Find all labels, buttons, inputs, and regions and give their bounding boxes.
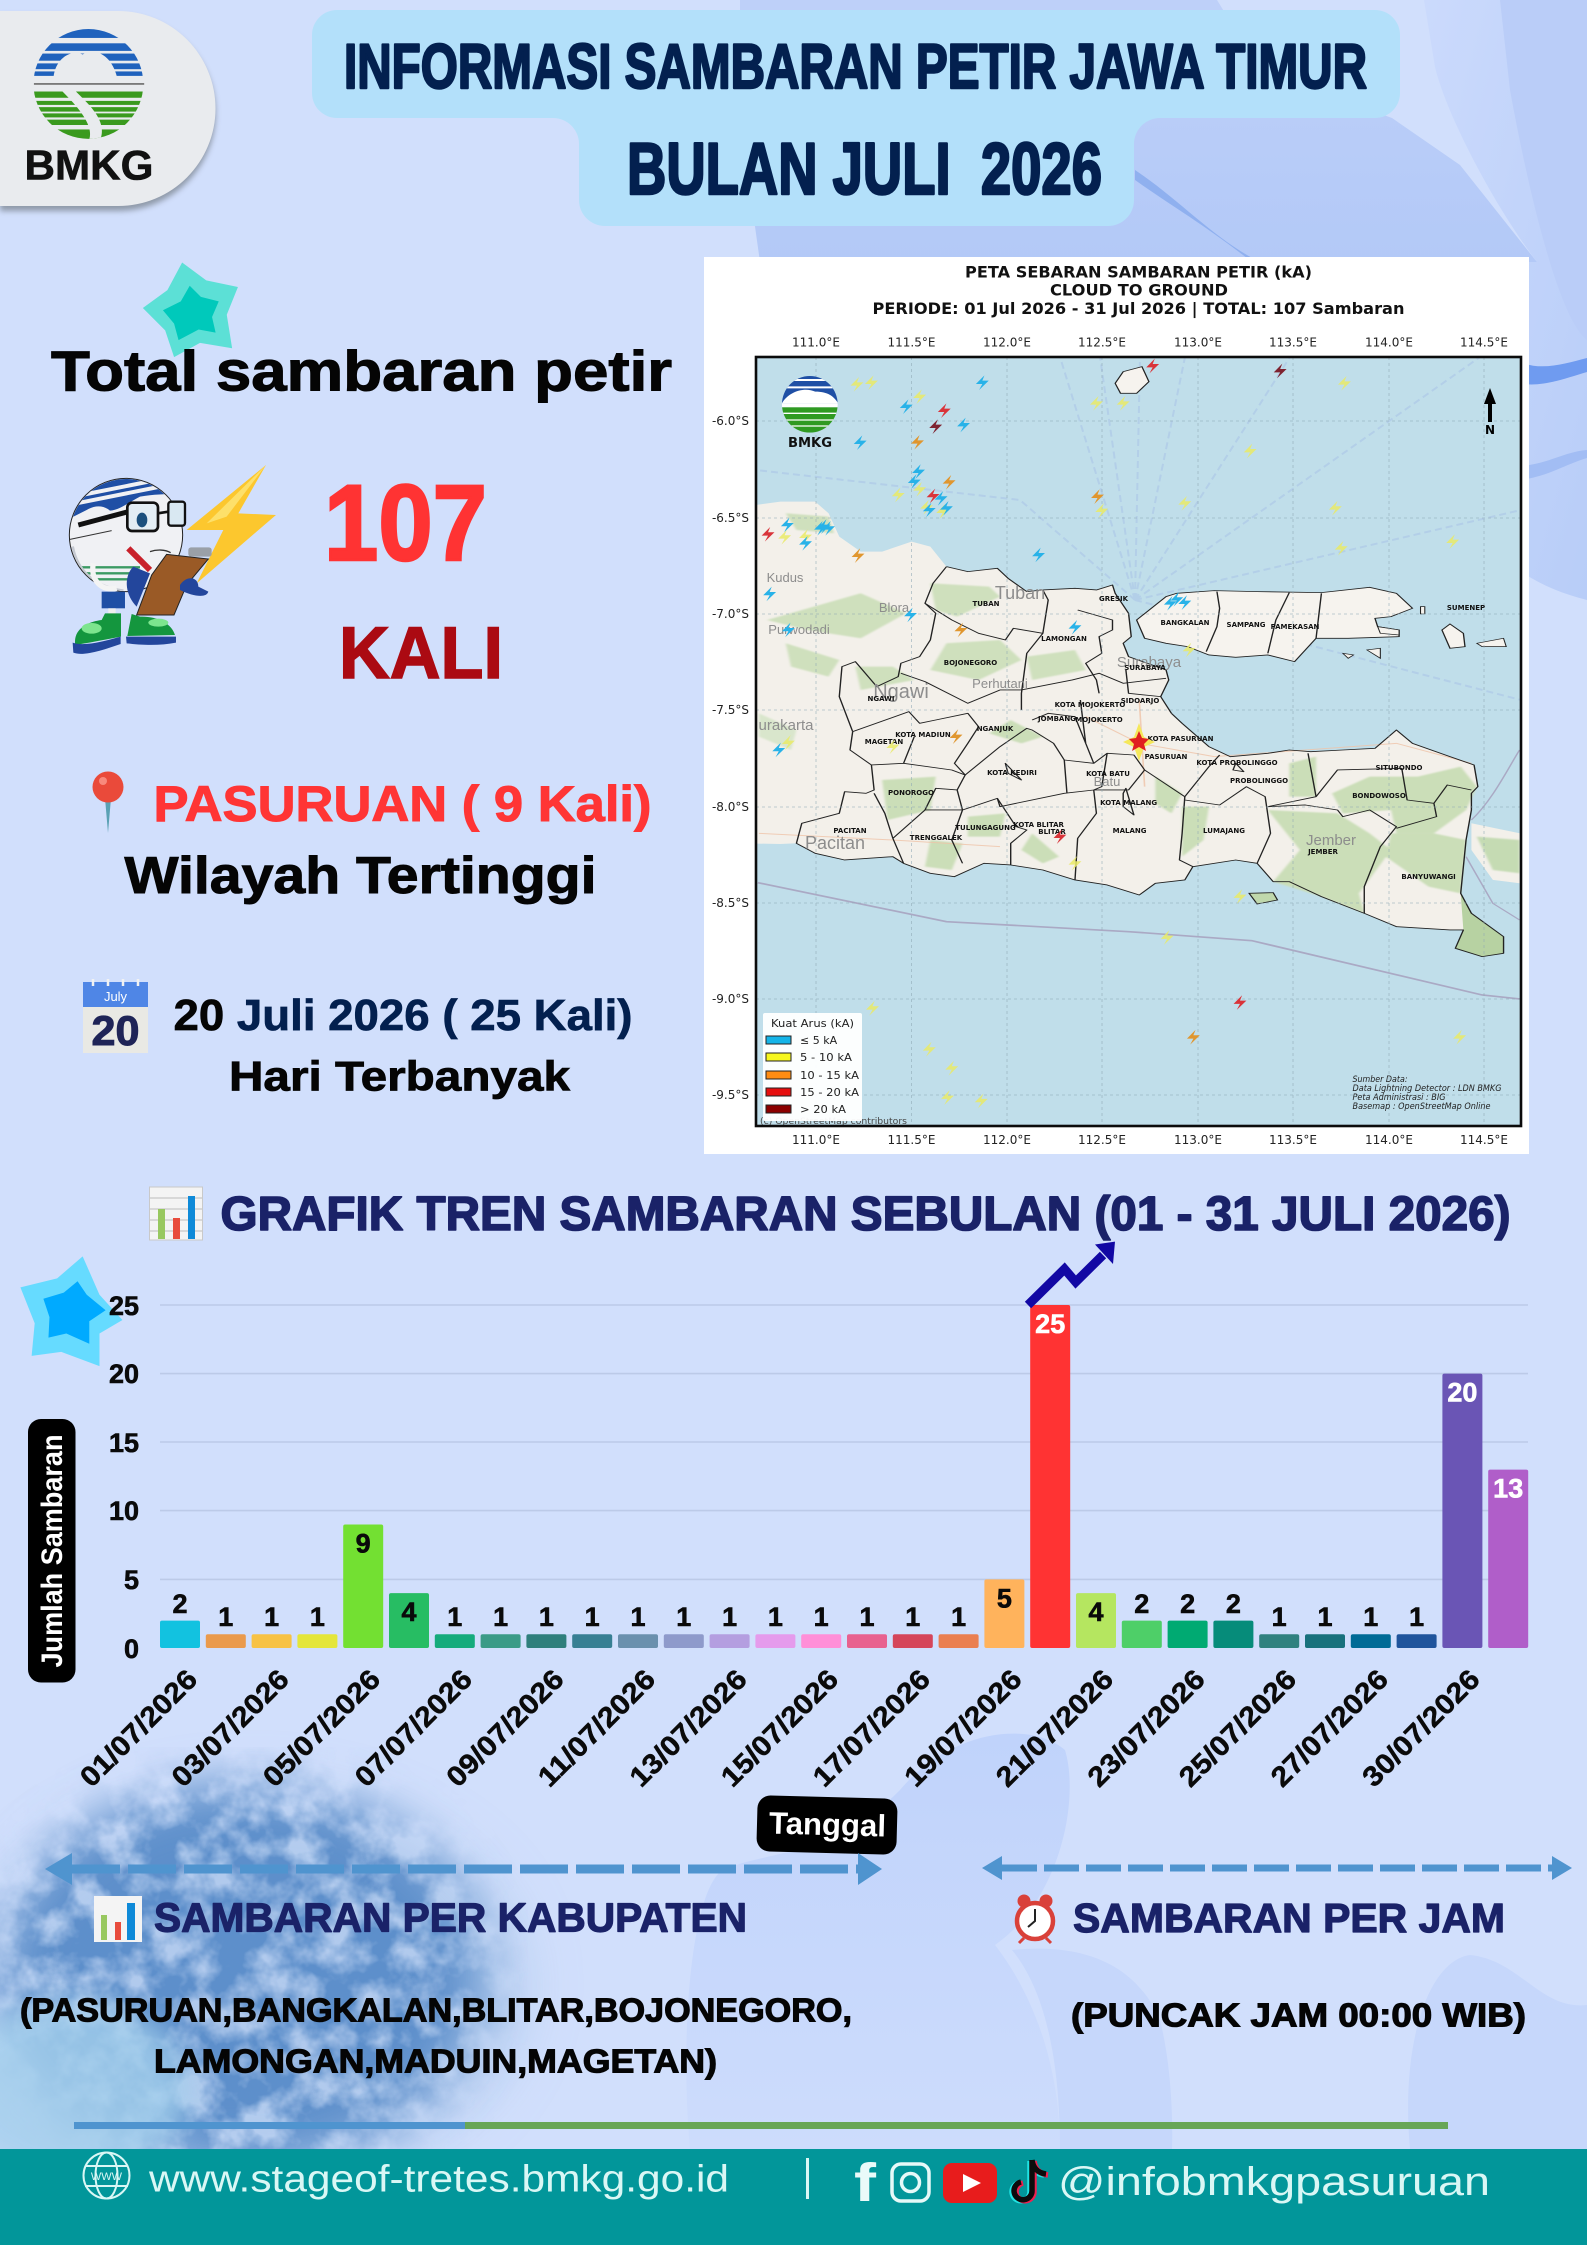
icon: north arrow: [1484, 388, 1496, 437]
district list: LAMONGAN,MADUIN,MAGETAN): [154, 2042, 717, 2080]
east java regional detail: [758, 700, 1520, 999]
map legend: [763, 1013, 862, 1121]
title banner: [312, 10, 1400, 226]
x axis date labels: 03/07/2026: [165, 1663, 295, 1793]
x axis title pill: Tanggal: [769, 1805, 886, 1844]
map titles: [872, 262, 1404, 319]
total strike count: 107: [324, 462, 487, 583]
icon: highest strike star: [1123, 723, 1155, 761]
kabupaten labels: BLITAR: [1038, 828, 1066, 836]
map axis labels: 111.0°E: [792, 1133, 840, 1147]
kabupaten labels: KOTA BLITAR: [1013, 821, 1064, 829]
logo wordmark: BMKG: [24, 142, 154, 188]
y axis tick labels: 20: [109, 1359, 139, 1389]
per district heading: SAMBARAN PER KABUPATEN: [154, 1894, 747, 1940]
icon: bar chart emoji: [150, 1187, 202, 1240]
map axis labels: 113.5°E: [1269, 1133, 1317, 1147]
map axis labels: 112.5°E: [1078, 1133, 1126, 1147]
kabupaten labels: KOTA MOJOKERTO: [1055, 701, 1125, 709]
kabupaten labels: BANYUWANGI: [1401, 873, 1456, 881]
bar value labels: 1: [310, 1602, 325, 1632]
panel: lightning distribution map: -9.0°S: [712, 992, 749, 1006]
highest region: PASURUAN ( 9 Kali): [154, 776, 652, 832]
bar value labels: 4: [1088, 1597, 1104, 1627]
forest patches: [767, 513, 1086, 690]
bar value labels: 1: [630, 1602, 646, 1632]
icon: north arrow: N: [1485, 423, 1495, 437]
bar value labels: 1: [768, 1602, 783, 1632]
kabupaten labels: SITUBONDO: [1375, 764, 1423, 772]
icon: calendar: [83, 979, 148, 1054]
icon: facebook: f: [854, 2153, 877, 2213]
grid lines: [756, 357, 1521, 1126]
map legend: 5 - 10 kA: [800, 1051, 852, 1064]
bar value labels: 13: [1493, 1474, 1523, 1504]
kabupaten labels: KOTA PASURUAN: [1148, 735, 1214, 743]
kabupaten labels: KOTA MADIUN: [895, 731, 951, 739]
land: [732, 367, 1520, 957]
x axis date labels: 21/07/2026: [990, 1663, 1119, 1793]
kabupaten labels: SUMENEP: [1447, 604, 1485, 612]
bar value labels: 9: [356, 1528, 371, 1558]
y axis tick labels: [109, 1291, 139, 1664]
panel: lightning distribution map: -9.5°S: [712, 1088, 749, 1102]
kabupaten labels: BANGKALAN: [1161, 619, 1210, 627]
map axis labels: 114.5°E: [1460, 336, 1508, 350]
bar value labels: 2: [1134, 1589, 1149, 1619]
peak day: 20 Juli 2026 ( 25 Kali): [174, 991, 632, 1040]
x axis date labels: 27/07/2026: [1265, 1663, 1394, 1793]
kabupaten labels: PROBOLINGGO: [1230, 777, 1288, 785]
kabupaten labels: PACITAN: [833, 827, 867, 835]
bar value labels: 1: [585, 1602, 600, 1632]
map frame: [756, 357, 1521, 1126]
map area: (c) OpenStreetMap contributors: [760, 1117, 907, 1127]
basemap place names: Ngawi: [873, 681, 929, 703]
map titles: PETA SEBARAN SAMBARAN PETIR (kA): [965, 262, 1312, 282]
basemap place names: Blora: [879, 600, 910, 615]
kabupaten labels: MAGETAN: [865, 738, 903, 746]
kabupaten labels: GRESIK: [1099, 595, 1129, 603]
kabupaten labels: NGAWI: [867, 695, 895, 703]
bar value labels: 1: [493, 1602, 508, 1632]
kabupaten labels: PASURUAN: [1145, 753, 1188, 761]
icon: tiktok: [1012, 2160, 1048, 2201]
icon: globe: [84, 2152, 130, 2198]
x axis date labels: 09/07/2026: [440, 1663, 570, 1793]
basemap place names: Pacitan: [805, 833, 865, 853]
bar value labels: 1: [1272, 1602, 1287, 1632]
shipping lanes: [756, 357, 1521, 700]
chart heading: GRAFIK TREN SAMBARAN SEBULAN (01 - 31 JULI 2026): [220, 1188, 1510, 1241]
x axis date labels: 23/07/2026: [1081, 1663, 1211, 1793]
y axis title: [28, 1419, 76, 1682]
x axis date labels: 07/07/2026: [349, 1663, 478, 1793]
map axis labels: 113.0°E: [1174, 1133, 1222, 1147]
kabupaten labels: SURABAYA: [1124, 664, 1166, 672]
map legend: ≤ 5 kA: [800, 1034, 838, 1047]
arrow: hourly section divider: [982, 1856, 1572, 1880]
map axis labels: 112.5°E: [1078, 336, 1126, 350]
map axis labels: 114.0°E: [1365, 336, 1413, 350]
website: www.stageof-tretes.bmkg.go.id: [148, 2158, 729, 2200]
bar value labels: 1: [1363, 1602, 1378, 1632]
kabupaten labels: PAMEKASAN: [1271, 623, 1320, 631]
icon: instagram: [892, 2164, 929, 2201]
panel: lightning distribution map: -7.0°S: [712, 607, 749, 621]
map axis labels: 112.0°E: [983, 336, 1031, 350]
bar value labels: 2: [172, 1589, 188, 1619]
kabupaten labels: MOJOKERTO: [1075, 716, 1123, 724]
panel: lightning distribution map: -6.0°S: [712, 414, 749, 428]
panel: lightning distribution map: -7.5°S: [712, 703, 749, 717]
basemap place names: Purwodadi: [768, 622, 830, 637]
map axis labels: 114.5°E: [1460, 1133, 1508, 1147]
bars: [160, 1305, 1528, 1648]
roads: [759, 700, 1471, 847]
map source note: Sumber Data:: [1352, 1075, 1408, 1085]
x axis date labels: 30/07/2026: [1356, 1663, 1486, 1793]
x axis date labels: 25/07/2026: [1173, 1663, 1302, 1793]
map axis labels: 111.0°E: [792, 336, 840, 350]
total strikes heading: Total sambaran petir: [51, 340, 672, 404]
kabupaten boundaries: [796, 700, 1504, 957]
icon: BMKG mascot with clipboard and lightning: [69, 465, 276, 654]
map axis labels: [792, 336, 1508, 1147]
basemap place names: Batu: [1094, 774, 1120, 789]
map titles: PERIODE: 01 Jul 2026 - 31 Jul 2026 | TOTAL: 107 Sambaran: [872, 299, 1404, 319]
kabupaten labels: TUBAN: [972, 600, 1000, 608]
icon: calendar: 20: [92, 1007, 140, 1054]
district list: (PASURUAN,BANGKALAN,BLITAR,BOJONEGORO,: [20, 1992, 852, 2028]
per hour heading: SAMBARAN PER JAM: [1073, 1895, 1505, 1941]
y axis tick labels: 5: [124, 1565, 139, 1595]
bar value labels: 25: [1035, 1309, 1065, 1339]
map source note: Data Lightning Detector : LDN BMKG: [1352, 1084, 1502, 1094]
peak hour: (PUNCAK JAM 00:00 WIB): [1071, 1996, 1526, 2034]
icon: blue star: [20, 1256, 122, 1366]
chart: daily strike trend: [28, 1291, 1528, 1793]
social handle: @infobmkgpasuruan: [1058, 2160, 1490, 2204]
icon: map pin: [92, 772, 124, 833]
x axis date labels: 11/07/2026: [532, 1663, 661, 1793]
icon: calendar: July: [104, 989, 128, 1004]
bar value labels: [172, 1309, 1523, 1632]
basemap place names: Perhutani: [972, 676, 1028, 691]
bar value labels: 1: [539, 1602, 554, 1632]
y axis tick labels: 10: [109, 1496, 139, 1526]
y axis tick labels: 15: [109, 1428, 139, 1458]
map legend: 15 - 20 kA: [800, 1086, 859, 1099]
north java boundaries: [839, 567, 1321, 732]
panel: lightning distribution map: -8.5°S: [712, 896, 749, 910]
map axis labels: 113.5°E: [1269, 336, 1317, 350]
kabupaten labels: BOJONEGORO: [944, 659, 997, 667]
bar value labels: 2: [1180, 1589, 1195, 1619]
icon: bar chart emoji small: [94, 1896, 142, 1942]
map source note: Basemap : OpenStreetMap Online: [1352, 1102, 1490, 1112]
arrow: district section divider: [45, 1853, 882, 1885]
kabupaten labels: LAMONGAN: [1041, 635, 1087, 643]
footer band: [0, 2149, 1587, 2245]
kabupaten labels: TULUNGAGUNG: [955, 824, 1016, 832]
footer divider: [74, 2122, 1448, 2129]
map source note: [1352, 1075, 1502, 1112]
kabupaten labels: [833, 595, 1485, 881]
x axis date labels: 19/07/2026: [898, 1663, 1028, 1793]
bar value labels: 1: [814, 1602, 829, 1632]
bar value labels: 20: [1447, 1378, 1477, 1408]
x axis date labels: 15/07/2026: [715, 1663, 844, 1793]
lightning strike markers: [762, 359, 1466, 1108]
panel: lightning distribution map: -8.0°S: [712, 800, 749, 814]
basemap place names: Kudus: [767, 570, 804, 585]
bar value labels: 1: [951, 1602, 966, 1632]
x axis date labels: [74, 1663, 1486, 1793]
icon: globe: WWW: [91, 2171, 123, 2183]
arrow: peak trend: [1028, 1242, 1115, 1305]
kabupaten labels: LUMAJANG: [1203, 827, 1245, 835]
title line 2: BULAN JULI 2026: [627, 129, 1102, 210]
bar value labels: 1: [1317, 1602, 1333, 1632]
bar value labels: 1: [722, 1602, 737, 1632]
bar value labels: 1: [1409, 1602, 1424, 1632]
kabupaten labels: NGANJUK: [977, 725, 1014, 733]
icon: BMKG logo on map: [782, 376, 838, 447]
icon: youtube: [943, 2163, 997, 2203]
district list: [20, 1992, 852, 2080]
kabupaten labels: KOTA PROBOLINGGO: [1196, 759, 1278, 767]
bar value labels: 1: [264, 1602, 279, 1632]
kabupaten labels: JOMBANG: [1037, 715, 1076, 723]
basemap place names: Tuban: [995, 583, 1045, 603]
peak day caption: Hari Terbanyak: [229, 1052, 571, 1100]
basemap place names: urakarta: [758, 717, 814, 734]
y axis title: Jumlah Sambaran: [36, 1434, 69, 1668]
unit label: KALI: [339, 613, 503, 694]
icon: alarm clock: [1017, 1894, 1053, 1943]
kabupaten labels: SAMPANG: [1227, 621, 1266, 629]
bar value labels: 1: [218, 1602, 233, 1632]
map axis labels: 113.0°E: [1174, 336, 1222, 350]
map area: [732, 357, 1521, 1127]
map legend: Kuat Arus (kA): [771, 1017, 854, 1030]
bar value labels: 4: [401, 1597, 417, 1627]
maritime boundary: [758, 883, 1520, 999]
kabupaten labels: BONDOWOSO: [1352, 792, 1406, 800]
y axis tick labels: 0: [124, 1634, 139, 1664]
highest region caption: Wilayah Tertinggi: [124, 847, 596, 905]
kabupaten labels: KOTA BATU: [1086, 770, 1130, 778]
map axis labels: 112.0°E: [983, 1133, 1031, 1147]
bar value labels: 2: [1226, 1589, 1241, 1619]
icon: BMKG emblem: [31, 29, 147, 139]
y axis gridlines: [160, 1305, 1528, 1579]
icon: BMKG logo on map: BMKG: [788, 436, 832, 451]
kabupaten labels: MALANG: [1113, 827, 1147, 835]
panel: lightning distribution map: [704, 257, 1529, 1154]
y axis tick labels: 25: [109, 1291, 139, 1321]
basemap place names: [758, 570, 1356, 853]
x axis date labels: 01/07/2026: [74, 1663, 203, 1793]
kabupaten labels: TRENGGALEK: [910, 834, 963, 842]
basemap place names: Jember: [1306, 832, 1356, 849]
bar value labels: 1: [676, 1602, 691, 1632]
map axis labels: 114.0°E: [1365, 1133, 1413, 1147]
map axis labels: 111.5°E: [888, 336, 935, 350]
x axis date labels: 05/07/2026: [257, 1663, 386, 1793]
x axis date labels: 17/07/2026: [807, 1663, 936, 1793]
basemap place names: Surabaya: [1117, 654, 1182, 671]
kabupaten labels: KOTA MALANG: [1100, 799, 1157, 807]
x axis title pill: [756, 1795, 898, 1855]
bar value labels: 1: [447, 1602, 462, 1632]
x axis date labels: 13/07/2026: [623, 1663, 753, 1793]
kabupaten labels: PONOROGO: [888, 789, 934, 797]
panel: lightning distribution map: -6.5°S: [712, 511, 749, 525]
map axis labels: 111.5°E: [888, 1133, 935, 1147]
BMKG logo panel: [0, 11, 216, 211]
map legend: > 20 kA: [800, 1103, 846, 1116]
icon: teal star: [143, 262, 238, 357]
kabupaten labels: JEMBER: [1307, 848, 1339, 856]
bar value labels: 1: [905, 1602, 920, 1632]
map titles: CLOUD TO GROUND: [1050, 280, 1228, 300]
bar value labels: 1: [859, 1602, 875, 1632]
map source note: Peta Administrasi : BIG: [1352, 1093, 1446, 1103]
kabupaten labels: SIDOARJO: [1121, 697, 1159, 705]
bar value labels: 5: [997, 1584, 1012, 1614]
map legend: 10 - 15 kA: [800, 1069, 859, 1082]
kabupaten labels: KOTA KEDIRI: [987, 769, 1037, 777]
